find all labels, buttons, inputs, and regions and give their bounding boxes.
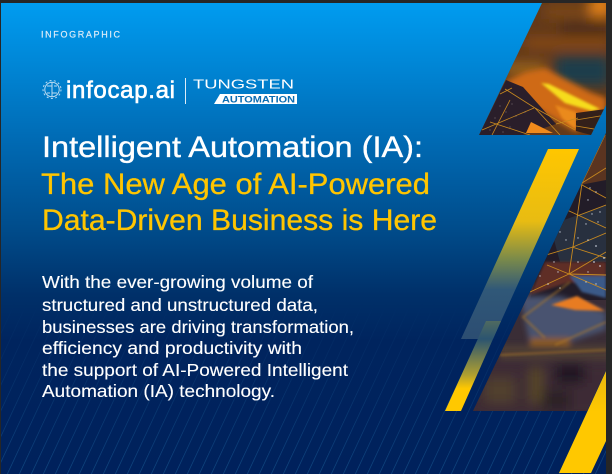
logo: Tungsten Automation: [193, 76, 297, 104]
image panel: lower circuitry: [470, 130, 612, 417]
eyebrow label: INFOGRAPHIC: [41, 30, 122, 40]
logo: infocap.ai: infocap.ai: [66, 77, 175, 104]
logo: Tungsten Automation: AUTOMATION: [222, 94, 295, 104]
body text: efficiency and productivity with: [42, 338, 302, 358]
logo divider: [185, 78, 186, 104]
title: [41, 131, 437, 237]
title: Data-Driven Business is Here: [42, 204, 437, 237]
image panel: top circuitry: [479, 3, 606, 135]
title: The New Age of AI-Powered: [41, 168, 430, 201]
yellow bar: bottom right: [559, 371, 606, 473]
body text: the support of AI-Powered Intelligent: [42, 360, 348, 380]
title: Intelligent Automation (IA):: [42, 131, 423, 164]
icon: brain gear: [43, 80, 61, 98]
body text: Automation (IA) technology.: [42, 381, 275, 401]
body text: businesses are driving transformation,: [42, 317, 354, 337]
yellow bar: short: [445, 321, 501, 411]
body text: With the ever-growing volume of: [42, 272, 313, 292]
yellow bar: long fading: [461, 149, 579, 339]
body text: structured and unstructured data,: [42, 295, 318, 315]
diagonal stripe pattern: [1, 345, 606, 474]
body text: [42, 272, 354, 401]
logo: Tungsten Automation: TUNGSTEN: [193, 76, 294, 92]
